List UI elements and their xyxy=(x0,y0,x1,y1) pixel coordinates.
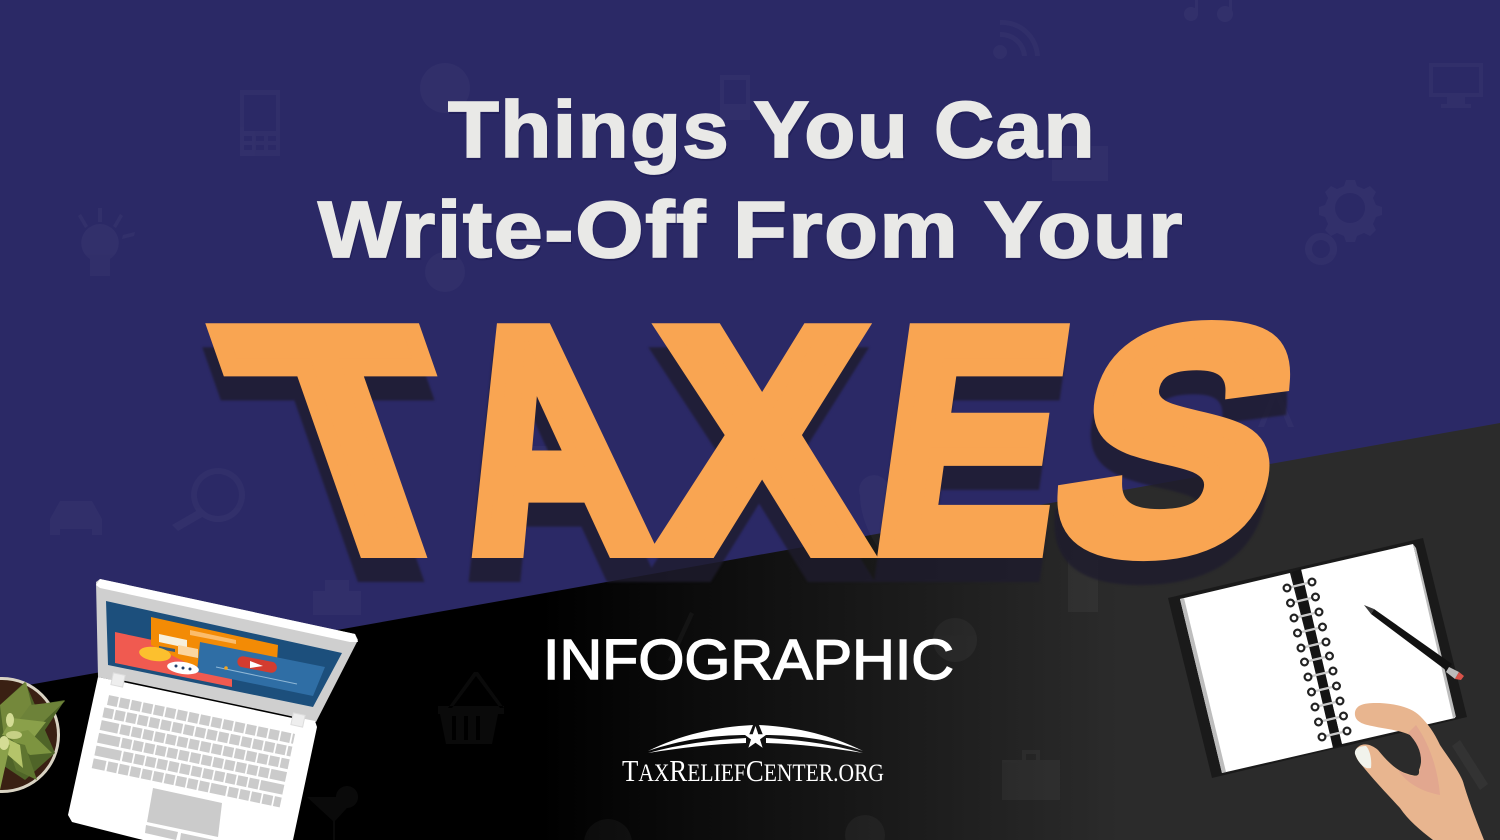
headline: TAXES xyxy=(190,265,1332,617)
headline: TAXES: T xyxy=(190,265,516,616)
palm shadow xyxy=(1398,725,1440,795)
spine xyxy=(1292,569,1342,748)
laptop base xyxy=(68,677,317,840)
faint background icons on desk xyxy=(307,560,1488,840)
trackpad xyxy=(147,788,222,837)
background: dark diagonal desk xyxy=(0,423,1500,840)
video scrubber xyxy=(216,667,297,684)
video play button xyxy=(236,655,278,674)
laptop screen xyxy=(106,601,342,707)
thumbnail xyxy=(1355,746,1371,768)
right page xyxy=(1300,544,1455,744)
left page xyxy=(1180,573,1335,773)
trackpad buttons xyxy=(145,825,178,840)
subtitle: INFOGRAPHIC: INFOGRAPHIC xyxy=(543,628,954,692)
notebook cover xyxy=(1168,538,1467,778)
screen red panel xyxy=(115,632,232,687)
headline: TAXES: S xyxy=(1023,265,1332,617)
logo wordmark: TAXRELIEFCENTER.ORG xyxy=(622,753,884,788)
laptop lid xyxy=(96,579,358,722)
headline: TAXES: E xyxy=(859,265,1086,617)
laptop xyxy=(68,579,358,840)
logo star xyxy=(744,726,767,748)
logo: Tax Relief Center xyxy=(622,725,884,788)
spiral rings xyxy=(1284,579,1350,740)
pencil xyxy=(1364,605,1464,680)
leaves xyxy=(0,682,65,780)
plant in pot xyxy=(0,677,65,793)
faint background icons on navy xyxy=(50,0,1483,615)
chat bubble white xyxy=(166,660,200,676)
headline: TAXES: X xyxy=(659,265,866,617)
laptop hinges xyxy=(111,673,125,687)
title line 2: Write-Off From Your xyxy=(318,185,1184,274)
headline: TAXES: A xyxy=(422,265,668,617)
keyboard keys xyxy=(93,700,294,802)
title: two lines xyxy=(318,85,1184,274)
hand holding notebook xyxy=(1355,703,1484,840)
logo swooshes xyxy=(648,725,863,753)
title line 1: Things You Can xyxy=(448,85,1096,174)
pot xyxy=(0,677,60,793)
screen orange window xyxy=(151,617,278,668)
screen blue video window xyxy=(197,642,325,696)
notebook xyxy=(1168,538,1467,778)
chat bubble yellow xyxy=(138,645,172,663)
